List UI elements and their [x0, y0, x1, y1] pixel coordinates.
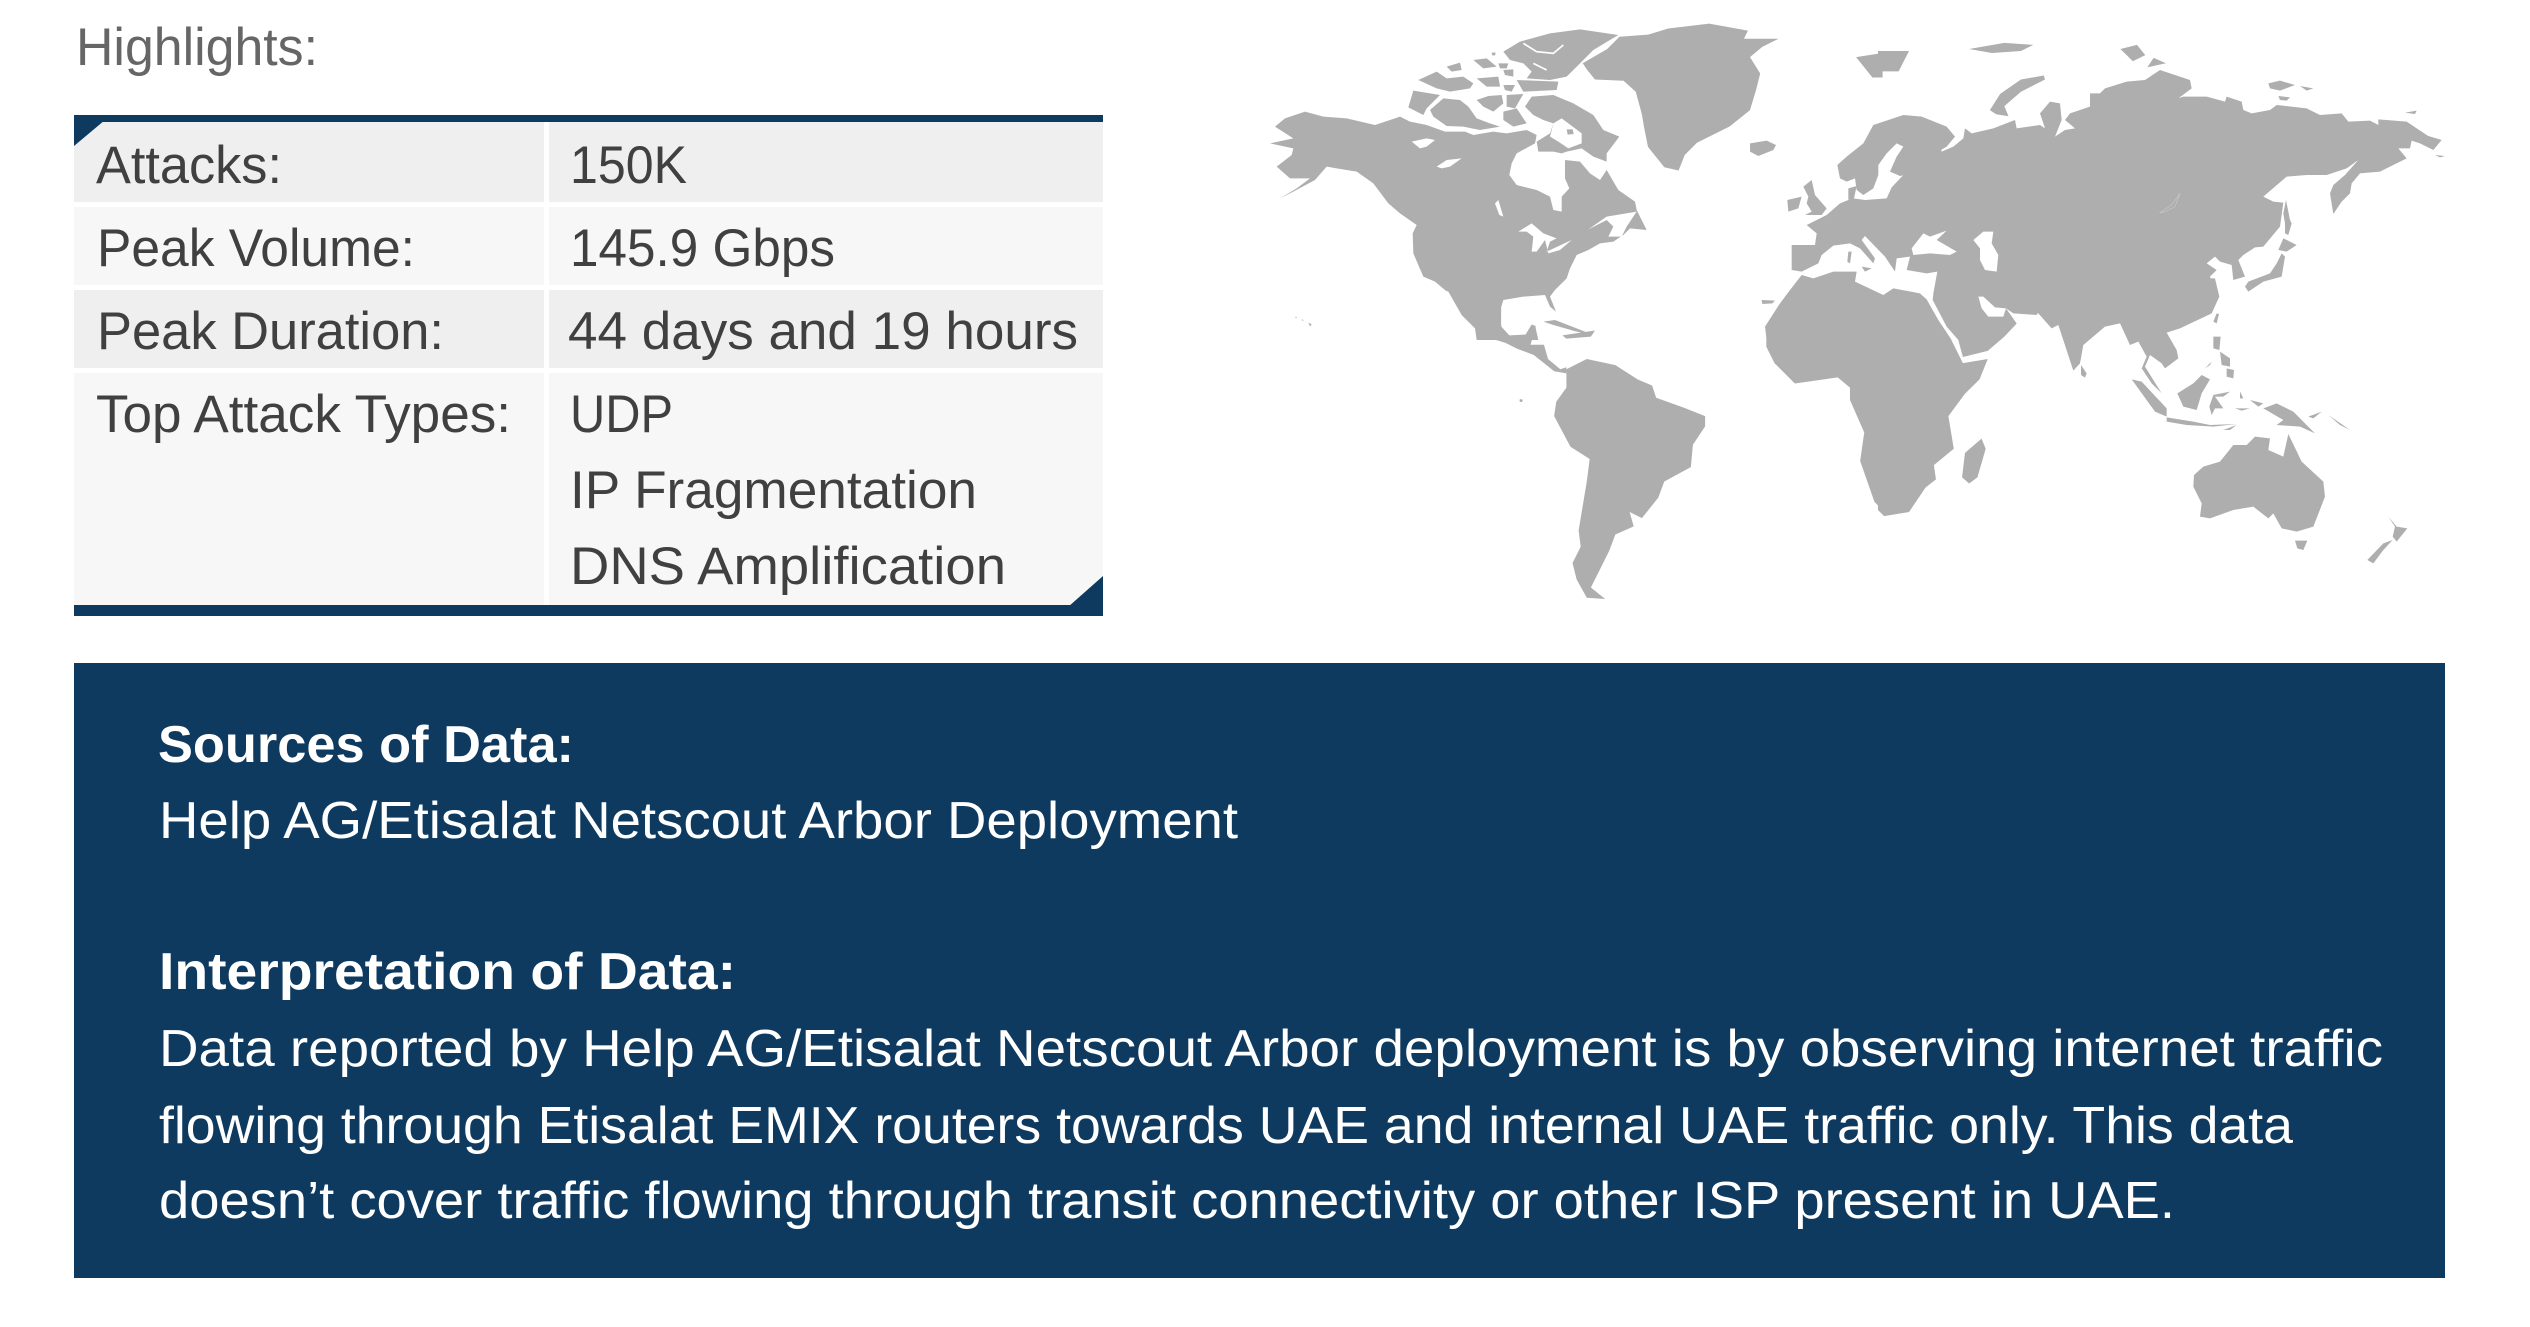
map: South America, Greenland, west Africa, Central America	[1452, 24, 1883, 599]
heading: Highlights: Highlights:	[76, 18, 318, 77]
lakes and bays	[1412, 43, 1637, 318]
row: top attack types: DNS Amplification	[570, 537, 1006, 596]
row: peak volume: Peak Volume:	[97, 219, 415, 278]
row: attacks: 150K	[570, 136, 687, 195]
row: attacks: Attacks:	[96, 136, 282, 195]
text: interpretation body: doesn’t cover traffic flowing through transit connectivity or other ISP present in UAE.	[159, 1172, 2175, 1230]
text: interpretation body: Data reported by Help AG/Etisalat Netscout Arbor deployment is by observing internet traffic	[159, 1020, 2383, 1078]
text: data source: Help AG/Etisalat Netscout Arbor Deployment	[159, 792, 1239, 850]
row: peak duration: 44 days and 19 hours	[568, 302, 1078, 361]
row: top attack types: UDP	[570, 385, 673, 444]
map: south Asia, southeast Asia and Oceania	[2020, 278, 2407, 563]
inland seas	[1912, 231, 2006, 317]
row: top attack types	[74, 373, 1103, 605]
row: peak volume: 145.9 Gbps	[570, 219, 835, 278]
heading: interpretation of data: Interpretation of Data:	[159, 943, 736, 1001]
panel: sources and interpretation of data	[74, 663, 2445, 1278]
text: interpretation body: flowing through Etisalat EMIX routers towards UAE and internal UAE traffic only. This data	[159, 1097, 2293, 1155]
map: northeast Asia and Japan	[2097, 70, 2445, 300]
corner accent: top left	[74, 120, 105, 146]
panel: highlights table	[74, 115, 1103, 616]
row: peak duration: Peak Duration:	[97, 302, 444, 361]
heading: sources of data: Sources of Data:	[158, 716, 574, 774]
map: Africa east, Arabia, Madagascar, Arctic islands	[1878, 43, 2166, 516]
row: top attack types: Top Attack Types:	[96, 385, 511, 444]
corner accent: bottom right	[1068, 576, 1103, 607]
text: interpretation body	[159, 1020, 2383, 1230]
row: peak duration	[74, 290, 1103, 368]
world map	[1270, 24, 2445, 599]
map: North America	[1270, 29, 1647, 340]
row: top attack types: IP Fragmentation	[570, 461, 977, 520]
row: peak volume	[74, 207, 1103, 285]
row: attacks	[74, 122, 1103, 202]
map: Europe and west Asia	[1750, 93, 2150, 340]
